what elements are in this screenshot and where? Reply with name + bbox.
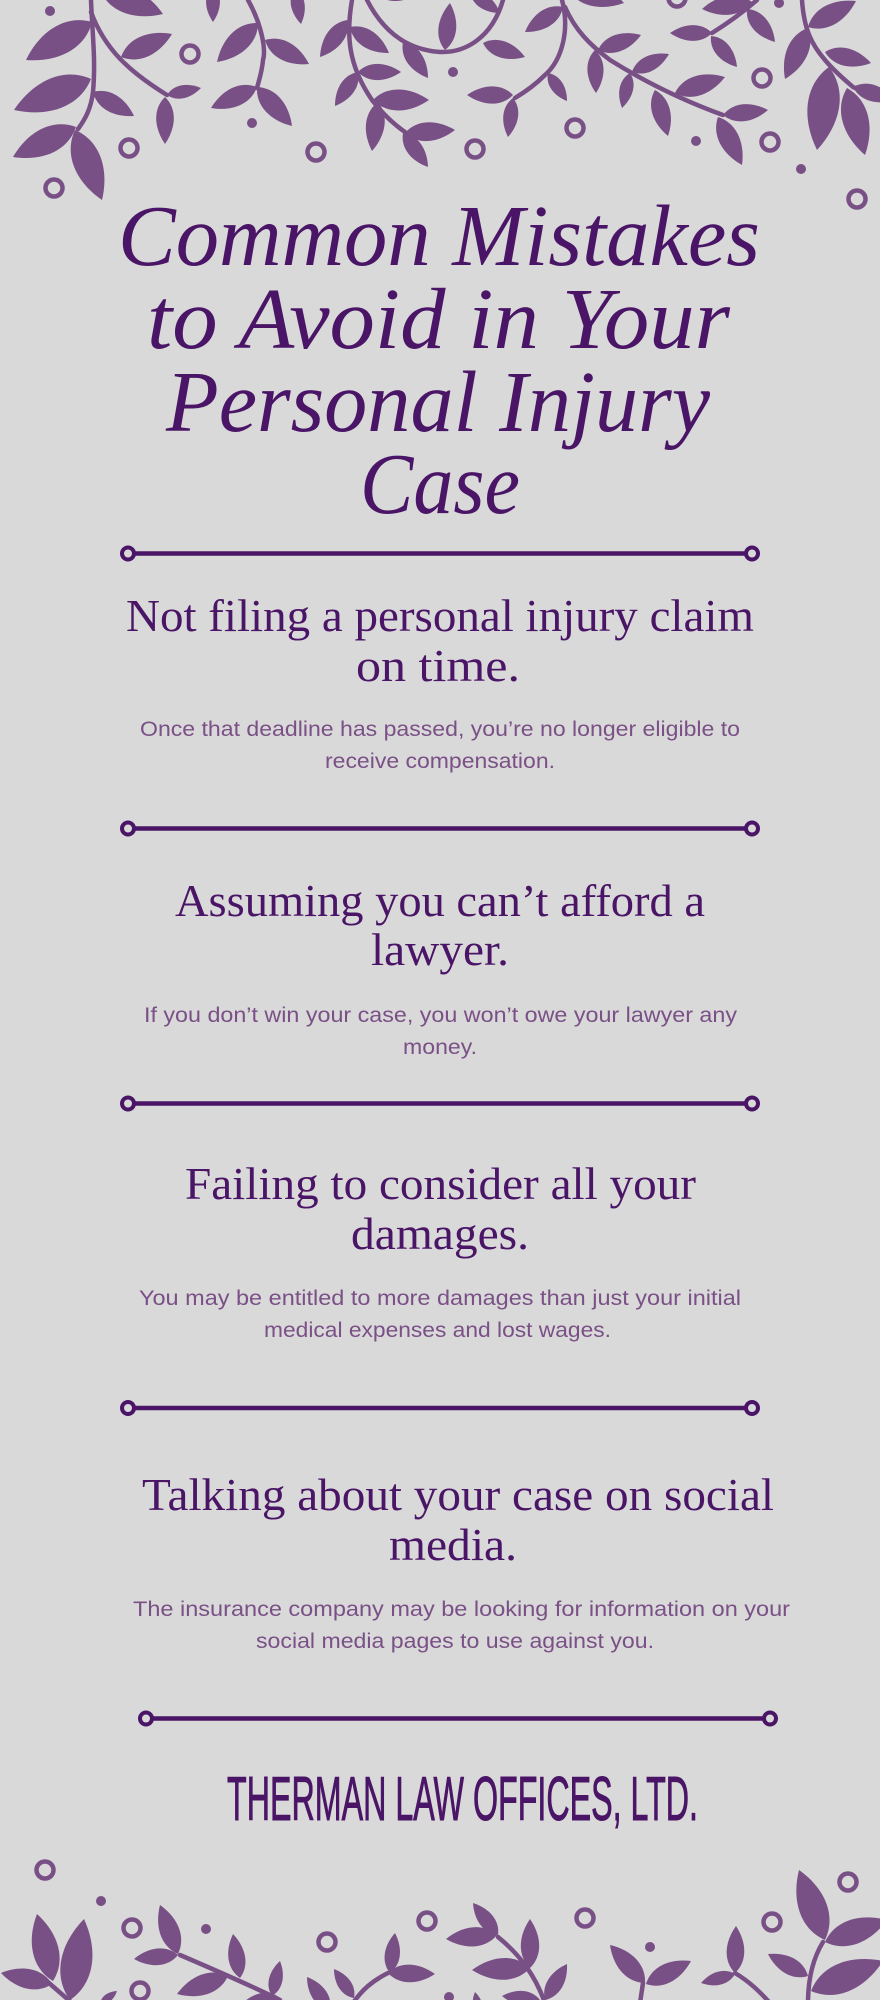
section 1: not filing on time	[126, 590, 754, 773]
title: Case	[360, 435, 520, 532]
section 3: considering damages: You may be entitled to more damages than just your initial	[139, 1287, 741, 1310]
bottom floral decoration	[0, 1862, 880, 2000]
section 4: social media	[133, 1469, 790, 1653]
section 2: affording a lawyer	[144, 875, 738, 1059]
divider 5	[140, 1712, 776, 1724]
section 1: not filing on time: Not filing a personal injury claim	[126, 590, 754, 641]
section 3: considering damages: medical expenses and lost wages.	[264, 1319, 611, 1342]
section 2: affording a lawyer: Assuming you can’t afford a	[175, 875, 705, 926]
section 2: affording a lawyer: money.	[403, 1036, 477, 1059]
divider 2	[122, 822, 758, 834]
title: Personal Injury	[165, 353, 710, 450]
section 4: social media: Talking about your case on social	[142, 1469, 774, 1520]
divider 4	[122, 1402, 758, 1414]
section 1: not filing on time: receive compensation.	[325, 750, 555, 773]
section 3: considering damages: damages.	[351, 1208, 529, 1259]
divider 1	[122, 548, 758, 560]
section 4: social media: The insurance company may be looking for information on your	[133, 1598, 790, 1621]
section 3: considering damages	[139, 1158, 741, 1342]
top floral decoration	[7, 0, 880, 208]
section 3: considering damages: Failing to consider all your	[185, 1158, 696, 1209]
title: to Avoid in Your	[147, 270, 731, 367]
section 2: affording a lawyer: If you don’t win your case, you won’t owe your lawyer any	[144, 1004, 738, 1027]
divider 3	[122, 1098, 758, 1110]
section 1: not filing on time: Once that deadline has passed, you’re no longer eligible to	[140, 718, 740, 741]
title: Common Mistakes	[118, 187, 760, 284]
section 4: social media: social media pages to use against you.	[256, 1630, 654, 1653]
title	[118, 187, 760, 532]
section 4: social media: media.	[389, 1519, 517, 1570]
section 2: affording a lawyer: lawyer.	[371, 924, 509, 975]
section 1: not filing on time: on time.	[356, 640, 520, 691]
